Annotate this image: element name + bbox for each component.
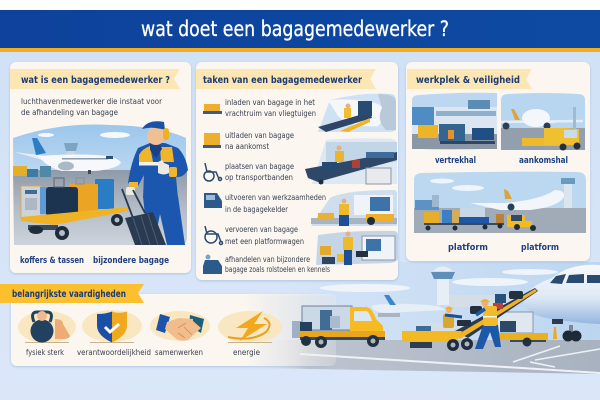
label: platform: platform [448,243,488,253]
illustration: uitladen transportband [305,138,397,184]
task: inladen: inladen van bagage in het [225,98,315,107]
icon: verantwoordelijkheid [82,310,142,343]
worker seated [443,306,462,328]
ribbon heading [10,69,180,89]
ribbon heading: wat is een bagagemedewerker ? [21,75,170,86]
label: bijzondere bagage: bijzondere bagage [93,256,169,266]
illustration: bagagemedewerker op het platform [13,121,188,245]
rolling suitcase [122,189,166,245]
header banner [0,10,600,52]
description text: luchthavenmedewerker die instaat voor [21,97,163,106]
ribbon heading: werkplek & veiligheid [416,75,520,86]
worker [126,121,188,245]
task: inladen: vrachtruim van vliegtuigen [225,109,316,118]
illustration: inladen vrachtruim [318,94,396,132]
icon: bagage op kar [203,104,222,114]
task: plaatsen [204,162,294,182]
icon: rolstoel [204,163,222,181]
panel: werkplek & veiligheid [406,62,590,261]
task: afhandelen: bagage zoals rolstoelen en kennels [225,265,330,274]
bottom scene foreground: vehicles [292,265,600,373]
icon: samenwerken [150,311,210,341]
icon: bestelwagen [204,193,222,208]
task: vervoeren: met een platformwagen [225,237,304,246]
icon: energie [218,311,282,343]
panel: taken van een bagagemedewerker [196,62,398,280]
baggage truck [292,306,385,348]
task: uitvoeren: in de bagagekelder [225,205,289,214]
task: vervoeren: vervoeren van bagage [225,225,298,234]
illustration: vertrekhal [412,93,497,150]
task: inladen [203,94,396,132]
task: plaatsen: op transportbanden [225,173,293,182]
label: fysiek sterk: fysiek sterk [26,348,65,357]
task: uitladen: na aankomst [225,142,269,151]
label: koffers & tassen: koffers & tassen [20,256,84,266]
ground markings [300,346,600,373]
bottom airport scene [255,262,600,374]
ribbon heading: belangrijkste vaardigheden [12,289,126,300]
task: afhandelen [203,254,330,274]
ribbon heading [407,69,532,89]
task: plaatsen: plaatsen van bagage [225,162,294,171]
description text [21,97,163,117]
label: energie: energie [233,348,260,357]
icon: fysiek sterk [18,311,76,343]
label: platform: platform [521,243,559,253]
yellow cart with cargo unit [497,312,548,346]
task: uitvoeren [204,190,397,226]
task: uitladen [203,131,397,184]
ribbon heading: taken van een bagagemedewerker [203,75,362,86]
background luggage carts [13,166,51,177]
panel: belangrijkste vaardigheden [0,284,336,366]
baggage cart [21,178,128,240]
label: vertrekhal: vertrekhal [435,156,476,166]
task: afhandelen: afhandelen van bijzondere [225,255,310,264]
label: verantwoordelijkheid: verantwoordelijkheid [77,348,151,357]
illustration: platformwagen [316,231,398,265]
description text: de afhandeling van bagage [21,108,118,117]
safety cone [553,327,557,339]
distant plane [372,295,446,317]
control tower [64,143,78,163]
label: samenwerken: samenwerken [155,348,203,357]
control tower [431,266,455,305]
icon: rolstoel [205,226,222,244]
task: uitladen: uitladen van bagage [225,131,294,140]
ribbon heading [0,284,144,303]
task: vervoeren [205,225,398,265]
title: wat doet een bagagemedewerker ? [141,17,449,41]
panel: wat is een bagagemedewerker [10,62,191,273]
airplane [14,138,121,174]
ribbon heading [196,69,376,89]
label: aankomshal: aankomshal [519,156,568,166]
illustration: aankomshal [501,93,585,150]
worker standing [475,299,501,349]
airplane nose [524,265,600,342]
task: uitvoeren: uitvoeren van werkzaamheden [225,193,326,202]
belt loader [402,288,538,351]
icon: auto [203,254,222,274]
illustration: werkzaamheden bagagekelder [311,190,397,226]
illustration: platform [414,172,586,233]
icon: bagagekar [203,133,221,148]
